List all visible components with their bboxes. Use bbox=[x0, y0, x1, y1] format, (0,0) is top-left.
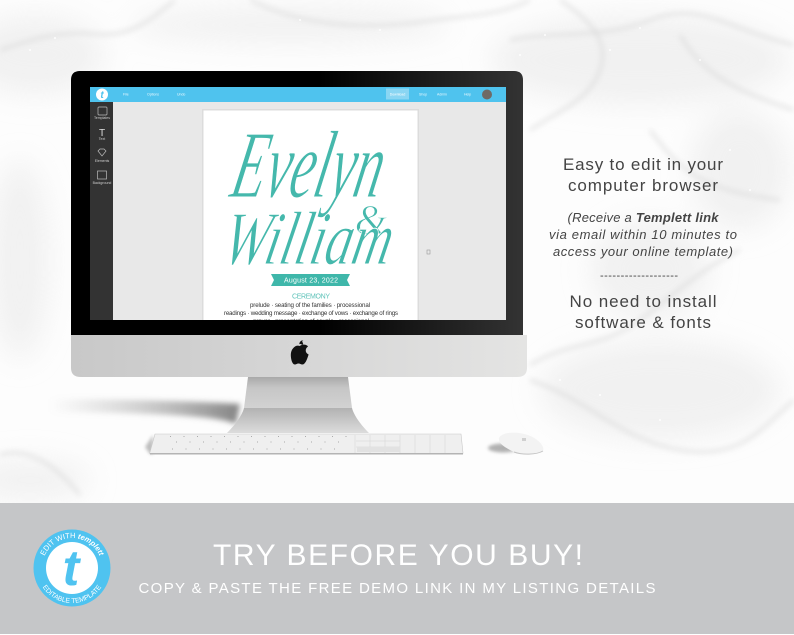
top toolbar: Options bbox=[147, 92, 159, 96]
screen bbox=[90, 87, 506, 330]
top toolbar: Admin bbox=[437, 92, 447, 96]
footer band bbox=[0, 503, 794, 634]
top toolbar bbox=[90, 87, 506, 102]
document page bbox=[202, 109, 419, 330]
monitor bezel bbox=[71, 71, 523, 335]
top toolbar: Undo bbox=[177, 92, 185, 96]
heading: no install bbox=[570, 292, 716, 332]
names: & bbox=[355, 198, 388, 244]
names: William bbox=[216, 197, 402, 281]
note: templett link: (Receive a Templett link bbox=[568, 210, 719, 225]
ceremony heading: CEREMONY bbox=[292, 294, 330, 300]
top toolbar: Shop bbox=[419, 92, 427, 96]
left sidebar: Background bbox=[93, 181, 111, 185]
badge: edit with templett: EDITABLE TEMPLATE bbox=[42, 584, 102, 603]
ceremony text: prelude · seating of the families · processional bbox=[250, 302, 370, 309]
left sidebar: T bbox=[99, 128, 105, 139]
note: templett link bbox=[549, 210, 737, 259]
footer subtitle: COPY & PASTE THE FREE DEMO LINK IN MY LISTING DETAILS bbox=[138, 580, 656, 597]
mouse bbox=[488, 433, 543, 454]
heading: no install: No need to install bbox=[570, 292, 716, 311]
top toolbar: File bbox=[123, 92, 129, 96]
apple logo bbox=[291, 340, 309, 364]
dashed divider: ------------------- bbox=[600, 270, 678, 282]
top toolbar: Download bbox=[390, 92, 405, 96]
left sidebar: Elements bbox=[95, 159, 110, 163]
badge: edit with templett: t bbox=[63, 540, 82, 596]
names bbox=[228, 130, 392, 265]
left sidebar: Text bbox=[99, 137, 105, 141]
ceremony text: readings · wedding message · exchange of vows · exchange of rings bbox=[224, 310, 398, 317]
top toolbar: Help bbox=[464, 92, 471, 96]
ceremony text bbox=[224, 302, 398, 320]
heading: easy to edit: Easy to edit in your bbox=[563, 155, 723, 174]
heading: easy to edit: computer browser bbox=[568, 176, 718, 195]
note: templett link: via email within 10 minutes to bbox=[549, 227, 737, 242]
footer title: TRY BEFORE YOU BUY! bbox=[213, 539, 583, 572]
monitor chin bbox=[71, 335, 527, 377]
keyboard bbox=[145, 434, 463, 454]
desk shadow of the monitor bbox=[50, 399, 240, 424]
names: Evelyn bbox=[222, 111, 396, 218]
badge: edit with templett bbox=[34, 530, 110, 606]
heading: no install: software & fonts bbox=[575, 313, 711, 332]
date ribbon bbox=[271, 274, 350, 286]
left sidebar: Templates bbox=[94, 116, 110, 120]
heading: easy to edit bbox=[563, 155, 723, 195]
monitor stand bbox=[227, 377, 369, 433]
cursor mark bbox=[427, 250, 430, 254]
note: templett link: access your online template) bbox=[553, 244, 733, 259]
top toolbar: t bbox=[100, 90, 104, 101]
marble background bbox=[0, 0, 794, 504]
ceremony text: prayer · presentation of couple · recessional bbox=[253, 318, 369, 325]
text block: browser editing bbox=[549, 155, 737, 332]
monitor bbox=[71, 71, 527, 433]
date ribbon: August 23, 2022 bbox=[284, 278, 338, 284]
left sidebar bbox=[90, 102, 113, 320]
badge: edit with templett: EDIT WITH templett bbox=[40, 532, 104, 556]
